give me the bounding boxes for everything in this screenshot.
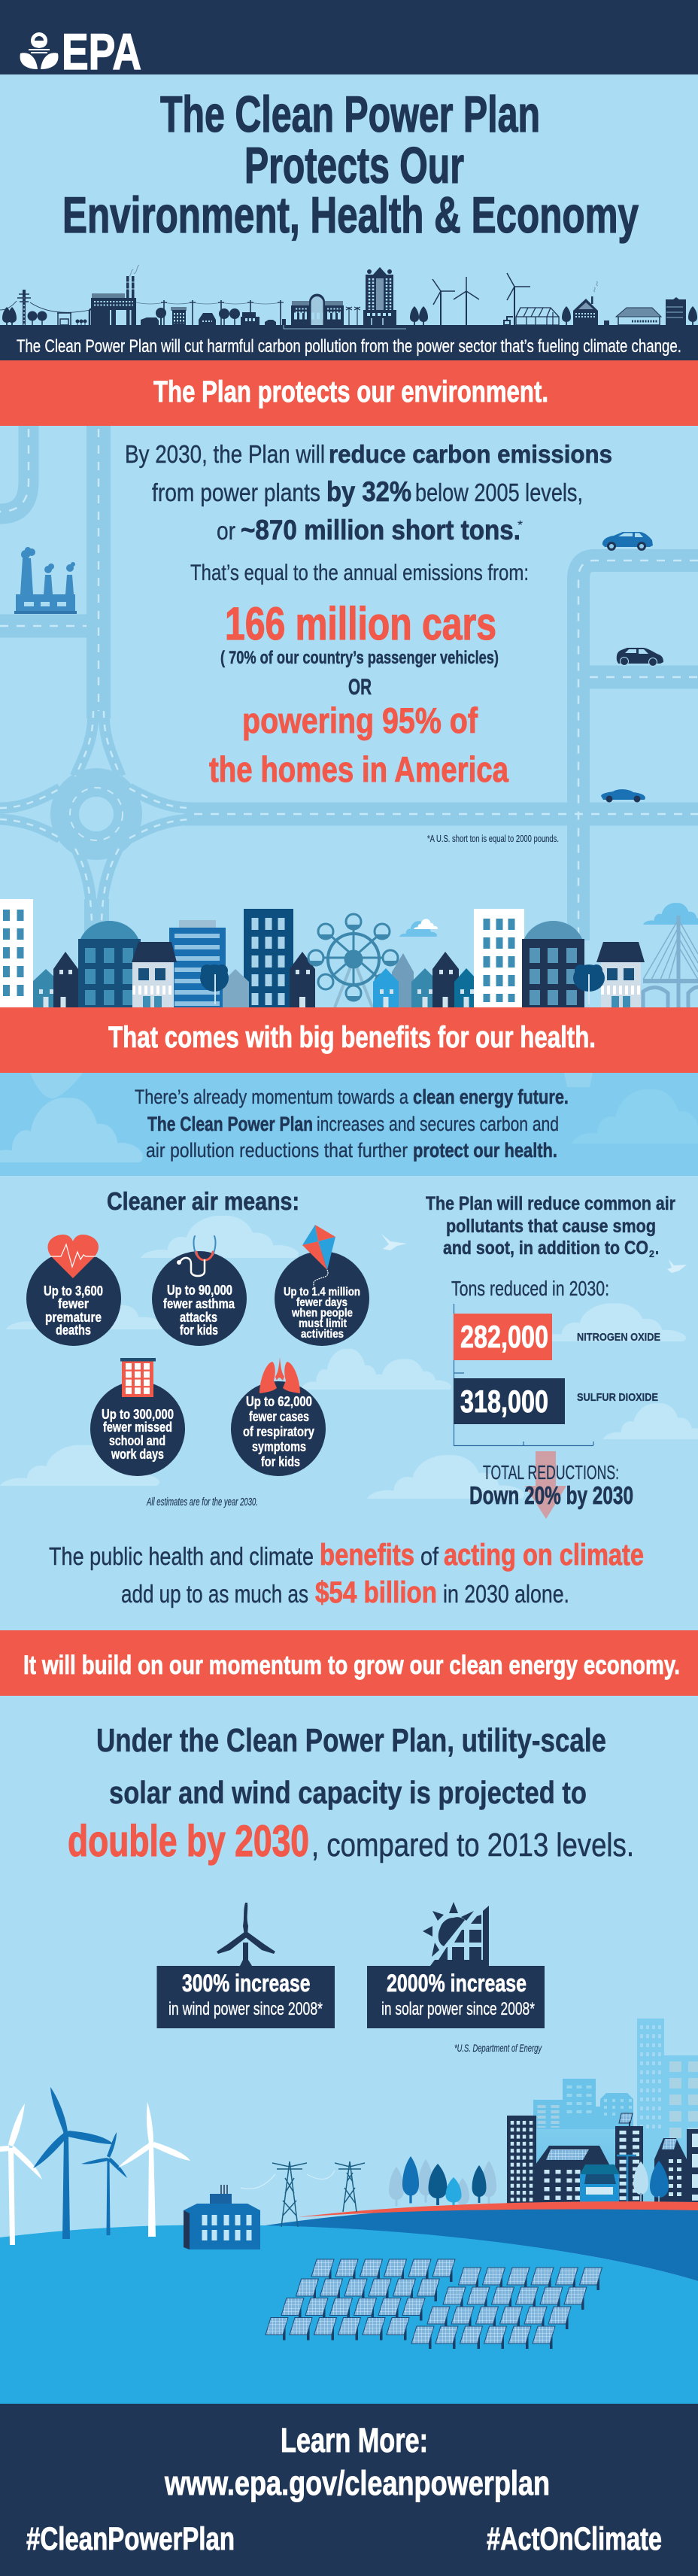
- climate benefits statement: of: [420, 1542, 439, 1570]
- total reductions: TOTAL REDUCTIONS:: [483, 1461, 619, 1484]
- skyline: trees and turbines: [410, 273, 530, 325]
- turbine: white right: [118, 2102, 190, 2237]
- stat circle: respiratory symptoms: for kids: [261, 1454, 300, 1469]
- houses right of wheel: [392, 953, 414, 1007]
- pollutants text: [426, 1193, 675, 1259]
- skyline: greenhouse: [504, 308, 559, 325]
- footer: [0, 2404, 698, 2576]
- icon: EPA logo flower: [20, 32, 58, 69]
- title: The Clean Power Plan: [160, 86, 540, 143]
- skyline: tower: [363, 267, 396, 325]
- shop house right: [601, 962, 641, 1007]
- road dashes: [0, 429, 698, 940]
- sky clouds: [0, 1216, 698, 1499]
- icon: sun and solar panel: [423, 1902, 489, 1966]
- bar: nitrogen oxide: NITROGEN OXIDE: [577, 1331, 660, 1344]
- pollutants text: pollutants that cause smog: [446, 1216, 656, 1237]
- health intro panel: There’s already momentum towards a: [135, 1086, 409, 1108]
- environment statistics: ~870 million short tons.: [241, 515, 520, 545]
- pollutants text: .: [655, 1238, 659, 1259]
- total reductions: Down 20% by 2030: [469, 1481, 633, 1509]
- capacity statement: double by 2030: [68, 1817, 309, 1866]
- stat circle: premature deaths: [26, 1235, 121, 1346]
- title: Protects Our: [244, 137, 464, 194]
- total reductions: [469, 1461, 633, 1509]
- climate benefits statement: $54 billion: [315, 1576, 437, 1609]
- economy section banner: [0, 1630, 698, 1696]
- bar chart: tons reduced: Tons reduced in 2030:: [451, 1277, 609, 1300]
- footer: www.epa.gov/cleanpowerplan: [164, 2464, 550, 2502]
- skyline: factory: [90, 265, 139, 325]
- icon: lungs: [259, 1357, 300, 1393]
- stat circle: asthma attacks: attacks: [180, 1310, 217, 1325]
- skyline: palm poles: [346, 307, 360, 325]
- climate benefits statement: The public health and climate: [49, 1542, 314, 1570]
- solar stat box: 2000% increase: [387, 1970, 527, 1997]
- dark strip with intro sentence: [0, 325, 698, 360]
- power station building: [184, 2185, 260, 2249]
- stat circle: limited activities: when people: [291, 1307, 353, 1320]
- stat circle: limited activities: activities: [301, 1328, 344, 1341]
- skyline: power lines and poles: [136, 300, 284, 325]
- background city: [533, 2019, 698, 2207]
- climate benefits statement: in 2030 alone.: [443, 1580, 569, 1608]
- stat circle: premature deaths: premature: [45, 1310, 102, 1325]
- small houses left: [33, 969, 59, 1007]
- wind stat box: 300% increase: [182, 1970, 310, 1997]
- environment statistics: below 2005 levels,: [415, 478, 583, 506]
- solar farm: [266, 2259, 602, 2349]
- environment statistics: *A U.S. short ton is equal to 2000 pounds.: [427, 833, 559, 844]
- icon: kite: [302, 1225, 335, 1286]
- stat circle: asthma attacks: Up to 90,000: [167, 1283, 232, 1298]
- icon: factory: [14, 547, 77, 614]
- foreground city: [507, 2113, 698, 2206]
- environment statistics: or: [217, 517, 235, 545]
- icon: heart: [47, 1235, 99, 1278]
- bridge: [643, 916, 698, 1007]
- stat circle: asthma attacks: fewer asthma: [163, 1296, 235, 1311]
- stat circle: respiratory symptoms: symptoms: [252, 1439, 306, 1454]
- health intro panel: [0, 1073, 698, 1176]
- stat circle: respiratory symptoms: Up to 62,000: [246, 1394, 312, 1409]
- wind stat box: [156, 1903, 335, 2028]
- health intro panel: increases and secures carbon and: [317, 1113, 559, 1135]
- white tower right: [474, 909, 524, 1007]
- road network: [0, 426, 698, 940]
- skyline: silo and tree: [666, 297, 697, 325]
- bar: nitrogen oxide: 282,000: [460, 1319, 548, 1354]
- title: [62, 86, 639, 244]
- stat circle: limited activities: [275, 1225, 369, 1346]
- health section banner: [0, 1007, 698, 1073]
- dark tower: [244, 909, 293, 1007]
- shop house: [132, 962, 174, 1007]
- skyline silhouette: [0, 265, 697, 326]
- environment section banner: The Plan protects our environment.: [153, 375, 548, 409]
- heading: cleaner air means: Cleaner air means:: [107, 1187, 299, 1215]
- stat circle: premature deaths: deaths: [56, 1323, 91, 1338]
- bar: nitrogen oxide: [454, 1314, 660, 1360]
- stat circle: premature deaths: fewer: [58, 1296, 89, 1311]
- birds: [381, 1234, 687, 1273]
- footnote: estimates: All estimates are for the year 2030.: [146, 1496, 258, 1508]
- capacity statement: [68, 1722, 634, 1866]
- stat circle: limited activities: fewer days: [296, 1296, 347, 1309]
- climate benefits statement: [49, 1539, 644, 1609]
- health intro panel: clean energy future.: [413, 1086, 569, 1108]
- houses and tree: [223, 969, 249, 1007]
- bar: sulfur dioxide: SULFUR DIOXIDE: [577, 1391, 658, 1404]
- environment statistics: ( 70% of our country’s passenger vehicles): [220, 648, 499, 668]
- white tower left: [0, 899, 33, 1007]
- Ferris wheel: [308, 914, 398, 1007]
- wind stat box: in wind power since 2008*: [168, 1999, 323, 2019]
- skyline: mall: [291, 293, 344, 325]
- stat circle: missed school and work days: [90, 1358, 185, 1476]
- footer: Learn More:: [281, 2421, 428, 2459]
- pylons: [241, 2161, 365, 2227]
- bar: sulfur dioxide: 318,000: [460, 1384, 548, 1419]
- turbine: dark blue small: [81, 2132, 127, 2235]
- skyline: pylon and trees: [0, 290, 90, 326]
- solar stat box: in solar power since 2008*: [381, 1999, 535, 2019]
- trees: [389, 2156, 496, 2210]
- icon: dark SUV: [617, 648, 663, 667]
- domed building: [78, 921, 141, 1007]
- landscape hills: [0, 2201, 698, 2404]
- environment statistics: by 32%: [326, 476, 411, 507]
- bar chart: tons reduced: [451, 1277, 660, 1446]
- health intro panel: air pollution reductions that further: [146, 1139, 408, 1162]
- cloud top right: [643, 903, 698, 925]
- stat circle: asthma attacks: [152, 1236, 247, 1346]
- cityscape with Ferris wheel: [0, 899, 698, 1007]
- stat circle: respiratory symptoms: fewer cases: [249, 1409, 309, 1424]
- environment statistics: By 2030, the Plan will: [125, 440, 325, 468]
- pollutants text: 2: [649, 1248, 654, 1259]
- environment statistics: the homes in America: [209, 749, 509, 789]
- pollutants text: and soot, in addition to CO: [443, 1238, 648, 1259]
- icon: blue sedan: [601, 789, 645, 802]
- header bar with EPA logo: [0, 0, 698, 80]
- environment section banner: [0, 360, 698, 426]
- icon: blue SUV: [602, 532, 653, 551]
- turbine: dark blue tall: [33, 2087, 114, 2239]
- stat circle: limited activities: Up to 1.4 million: [284, 1286, 360, 1299]
- climate benefits statement: benefits: [320, 1539, 414, 1572]
- small cloud: [399, 919, 438, 937]
- health intro panel: protect our health.: [413, 1139, 557, 1162]
- environment statistics: That’s equal to the annual emissions from:: [190, 560, 529, 585]
- capacity statement: solar and wind capacity is projected to: [109, 1775, 587, 1810]
- footer: #CleanPowerPlan: [26, 2521, 235, 2557]
- wind turbines: [0, 2087, 190, 2245]
- bar: sulfur dioxide: [454, 1378, 658, 1424]
- icon: wind turbine: [217, 1903, 275, 1966]
- capacity statement: , compared to 2013 levels.: [311, 1827, 634, 1864]
- health intro panel: The Clean Power Plan: [147, 1113, 313, 1135]
- stat circle: missed school and work days: Up to 300,000: [102, 1407, 174, 1422]
- solar stat box: [367, 1902, 545, 2028]
- stat circle: missed school and work days: school and: [109, 1433, 165, 1448]
- environment statistics: OR: [348, 675, 372, 700]
- environment statistics: 166 million cars: [225, 598, 496, 649]
- stat circle: premature deaths: Up to 3,600: [44, 1283, 103, 1299]
- stat circle: missed school and work days: fewer missed: [103, 1420, 172, 1435]
- climate benefits statement: acting on climate: [444, 1539, 644, 1572]
- turbine: white left: [0, 2104, 42, 2245]
- stat circle: limited activities: must limit: [299, 1317, 347, 1330]
- footnote: source: *U.S. Department of Energy: [454, 2042, 542, 2054]
- stat circle: respiratory symptoms: of respiratory: [243, 1424, 314, 1439]
- arrow: reductions down: [525, 1451, 566, 1519]
- blue striped tower: [179, 920, 216, 928]
- environment statistics: [125, 440, 612, 844]
- stat circle: respiratory symptoms: [231, 1357, 326, 1476]
- dome building right: [522, 921, 584, 1007]
- icon: stethoscope: [178, 1236, 215, 1276]
- stat circle: asthma attacks: for kids: [180, 1323, 218, 1338]
- skyline: truck, buildings, trees: [141, 307, 286, 325]
- stat circle: missed school and work days: work days: [111, 1447, 164, 1462]
- skyline: farmhouse and barn: [562, 281, 661, 325]
- environment statistics: powering 95% of: [242, 700, 478, 740]
- environment statistics: reduce carbon emissions: [329, 440, 612, 468]
- icon: office building: [120, 1358, 156, 1397]
- EPA wordmark: EPA: [62, 23, 141, 80]
- environment statistics: from power plants: [152, 478, 320, 506]
- climate benefits statement: add up to as much as: [121, 1580, 308, 1608]
- environment statistics: *: [517, 519, 523, 532]
